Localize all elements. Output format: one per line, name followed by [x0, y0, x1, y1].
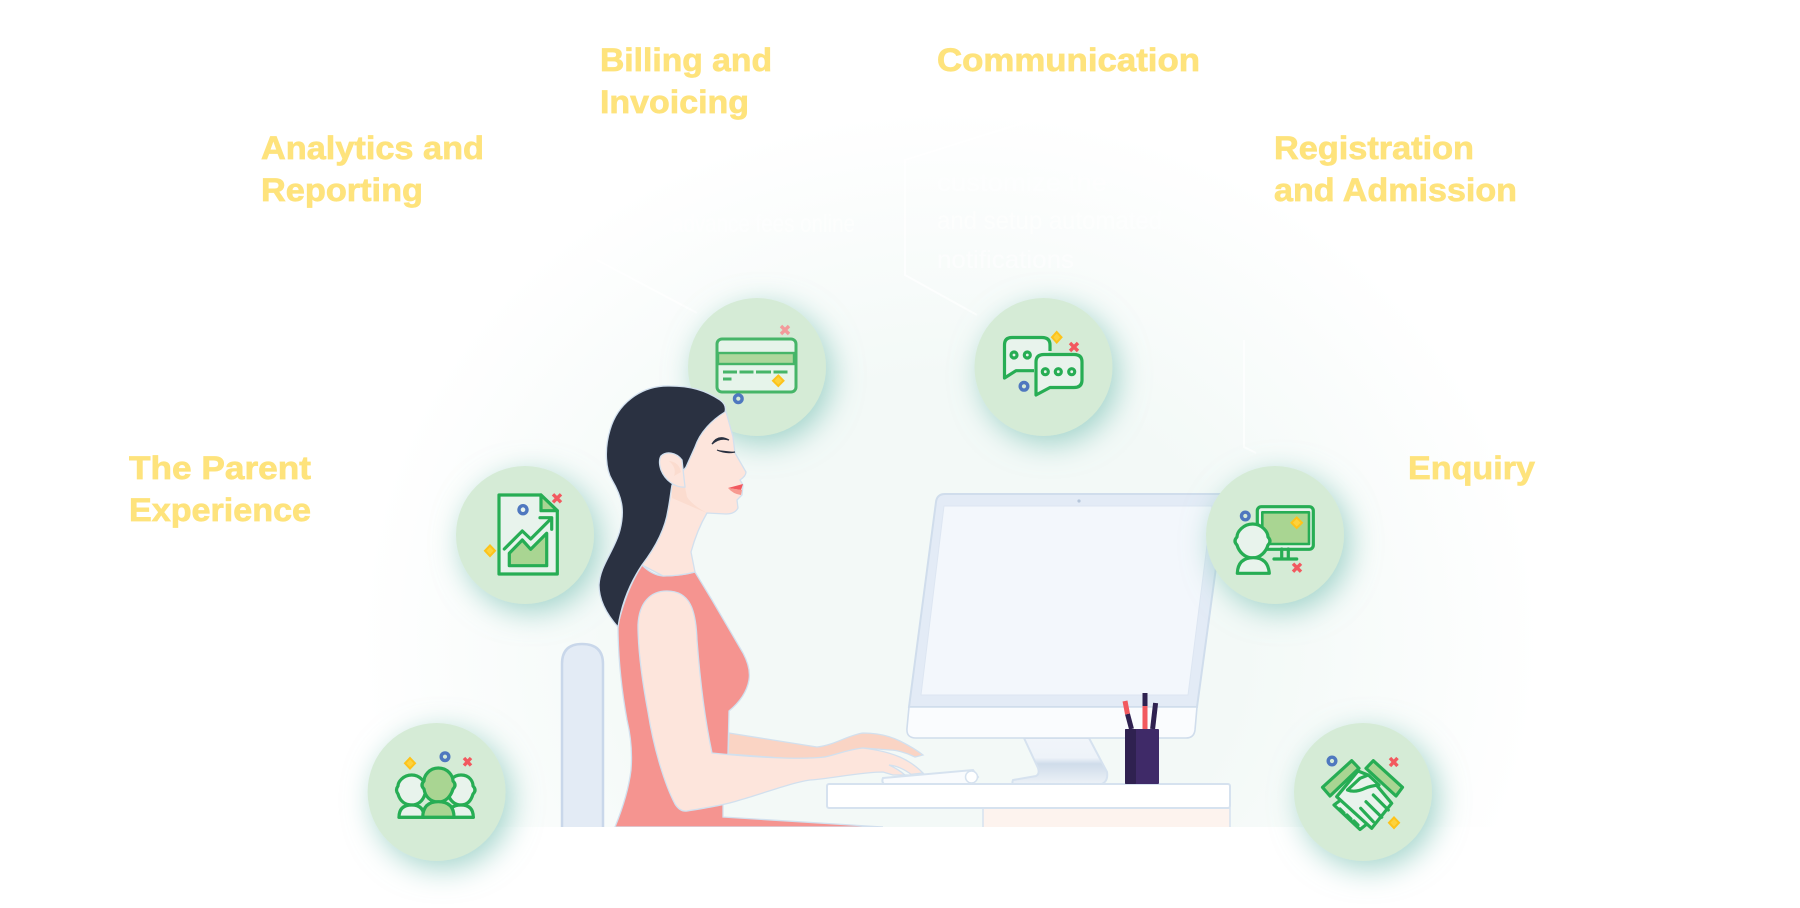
heading: Registration and Admission: Registration — [1274, 130, 1474, 166]
ear — [660, 453, 685, 487]
heading: Registration and Admission: and Admission — [1274, 172, 1517, 208]
near arm — [638, 591, 923, 811]
faint callout lines and text: and setup automated — [937, 207, 1162, 235]
heading: The Parent Experience: The Parent — [129, 450, 311, 486]
eyebrow and closed eye — [712, 438, 735, 453]
monitor chin — [907, 707, 1197, 738]
circle icon: handshake — [1294, 723, 1432, 861]
keyboard — [882, 770, 978, 785]
faint callout lines and text: customize the — [937, 169, 1107, 197]
monitor screen — [921, 506, 1212, 695]
heading: Analytics and Reporting — [261, 130, 484, 208]
heading: Registration and Admission — [1274, 130, 1517, 208]
heading: Billing and Invoicing: Billing and — [600, 42, 772, 78]
heading: Billing and Invoicing: Invoicing — [600, 84, 749, 120]
lips — [728, 484, 743, 490]
far arm — [728, 733, 923, 760]
woman at desk — [599, 386, 923, 827]
computer monitor — [907, 494, 1226, 785]
heading: Billing and Invoicing — [600, 42, 772, 120]
heading: Communication: Communication — [937, 42, 1200, 78]
faint callout lines and text — [597, 105, 1256, 453]
circle icon: parents group — [368, 723, 506, 861]
neck and face — [642, 408, 746, 576]
heading: Enquiry: Enquiry — [1408, 450, 1535, 486]
heading: The Parent Experience: Experience — [129, 492, 311, 528]
circle icon: chat bubbles — [974, 298, 1112, 436]
faint callout lines and text: advance fees online — [672, 210, 855, 238]
pen cup with pens — [1125, 693, 1159, 784]
chair back — [562, 644, 603, 840]
hair — [599, 386, 725, 627]
background glow — [558, 288, 1342, 827]
desk — [827, 784, 1230, 828]
heading: Analytics and Reporting: Analytics and — [261, 130, 484, 166]
circle icon: analytics report — [456, 466, 594, 604]
circle icon: credit card — [688, 298, 826, 436]
heading: Analytics and Reporting: Reporting — [261, 172, 423, 208]
webcam — [1077, 499, 1081, 503]
heading: The Parent Experience — [129, 450, 311, 528]
faint callout lines and text: notifications — [937, 246, 1074, 274]
neck shadow — [672, 486, 704, 512]
monitor stand — [1012, 738, 1107, 785]
dress — [615, 565, 883, 827]
circle icon: enquiry monitor — [1206, 466, 1344, 604]
monitor frame — [909, 494, 1226, 707]
